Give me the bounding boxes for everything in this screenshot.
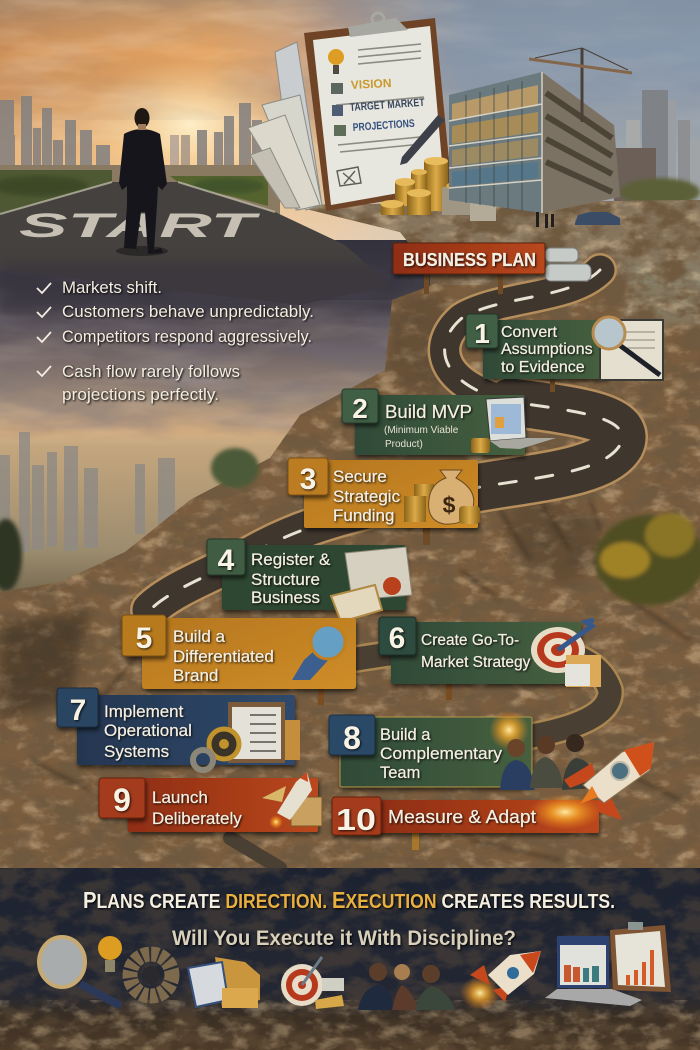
step 9 panel [99,772,322,832]
step 2 panel: Build MVP [385,402,472,422]
ground: roadside hedges [0,165,700,220]
badge 6 [379,617,416,655]
step 7 panel: Implement [104,702,184,721]
step 1 panel: Assumptions [501,341,593,358]
step 5 panel: Differentiated [173,647,274,666]
icon: document and magnifier [593,317,663,380]
businessman from behind [116,108,168,256]
coin stacks [380,157,496,221]
step 3 panel: Strategic [333,487,401,506]
step 8 panel: Build a [380,726,431,744]
badge 9: 9 [113,782,131,818]
step 2 panel [342,389,556,455]
icon: pen [400,115,445,165]
icon: target with dart [531,620,601,687]
checklist text: Competitors respond aggressively. [62,328,312,346]
rocky terrain [0,200,700,868]
step 7 panel: Operational [104,721,192,740]
step 1 panel: to Evidence [501,359,585,376]
icon: certificates and seal [331,547,412,622]
step 6 panel: Create Go-To- [421,632,519,649]
step 9 panel: Deliberately [152,809,242,828]
icon: small rocket and document [262,772,322,829]
badge 3: 3 [300,463,316,496]
step 9 panel: Launch [152,788,208,807]
badge 5: 5 [136,622,152,655]
step 5 panel: Brand [173,666,218,685]
icon: clipboard, folder and gears [193,702,300,770]
badge 1 [466,314,498,349]
sign: business plan [393,243,591,294]
step 8 panel: Complementary [380,745,503,763]
icon: laptop and chart clipboard [545,922,671,1006]
badge 6: 6 [389,622,405,655]
background: sunset sky [0,0,700,240]
step 3 panel: Funding [333,506,394,525]
start road [0,182,400,312]
left text: market realities [37,279,314,404]
checklist text: projections perfectly. [62,386,219,404]
step 7 panel: Systems [104,742,169,761]
step 10 panel [332,794,601,850]
badge 8: 8 [343,720,361,756]
bush: small left [211,448,259,488]
badge 4: 4 [218,544,235,577]
icon: light bulb [328,49,344,74]
badge 2 [342,389,378,424]
step 1 panel [466,314,663,392]
step 10 panel: Measure & Adapt [388,807,536,827]
badge 10 [332,797,381,837]
step 5 panel [122,615,356,705]
icon: rolled plans [545,248,591,281]
badge 9 [99,778,145,818]
skyline: far right city [614,90,700,203]
icon: three team members [500,734,598,790]
skyline: far left city [0,96,262,201]
icon: team [358,963,455,1010]
clipboard text: PROJECTIONS [352,118,415,134]
business plan clipboard [304,13,452,211]
office building under construction [449,72,620,213]
badge 3 [288,458,328,496]
badge 10: 10 [336,802,376,837]
step 8 panel [329,710,598,790]
checklist text: Customers behave unpredictably. [62,303,314,321]
icon: documents and folders [188,957,260,1008]
icon: money bag and coins [404,470,480,524]
step 7 panel [57,688,300,770]
step 5 panel: Build a [173,627,226,646]
badge 1: 1 [474,318,490,349]
step 6 panel: Market Strategy [421,654,531,671]
step 4 panel: Structure [251,570,320,589]
closing question: Will You Execute it With Discipline? [172,927,516,950]
badge 4 [207,539,245,577]
lower left skyline [0,425,290,605]
check icons [37,283,51,376]
step 2 panel: (Minimum Viable [384,425,459,436]
icon: large rocket [564,742,654,820]
badge 7: 7 [70,694,86,727]
icon: target [281,957,344,1009]
icon: laptop and coins [471,397,556,453]
bottom band [0,868,700,1050]
badge 8 [329,715,375,756]
checklist text: Cash flow rarely follows [62,363,240,381]
icon: money bag and coins: $ [443,492,456,518]
bottom icon row [39,922,671,1010]
road marking: START: START [19,207,262,245]
icon: magnifier, bulb and gear [39,936,172,1006]
checklist text: Markets shift. [62,279,162,297]
badge 7 [57,688,98,727]
icon: telescope [292,625,345,680]
step 8 panel: Team [380,764,420,782]
step 4 panel: Business [251,588,320,607]
storm clouds and left lower sky [0,240,430,455]
clipboard lines [336,44,424,152]
car and workers [536,212,620,228]
step 2 panel: Product) [385,439,423,450]
plan papers fanned behind clipboard [248,42,322,210]
step 3 panel [288,458,480,545]
icon: launch rocket [460,951,541,1010]
clipboard text: VISION [350,76,392,92]
step 6 panel [379,617,601,700]
sign: business plan: BUSINESS PLAN [403,250,536,270]
step 4 panel: Register & [251,550,331,569]
bush: right cliff [595,513,700,605]
checkbox [337,167,361,186]
closing headline: PLANS CREATE DIRECTION. EXECUTION CREATES RESULTS. [83,887,615,913]
badge 5 [122,615,166,656]
clipboard text: TARGET MARKET [349,97,425,114]
checklist text [62,279,314,404]
step 3 panel: Secure [333,467,387,486]
tower crane [529,48,632,122]
clipboard text [331,76,425,136]
step 1 panel: Convert [501,324,558,341]
winding road [150,270,622,868]
badge 2: 2 [352,393,368,424]
step 4 panel [207,539,412,622]
